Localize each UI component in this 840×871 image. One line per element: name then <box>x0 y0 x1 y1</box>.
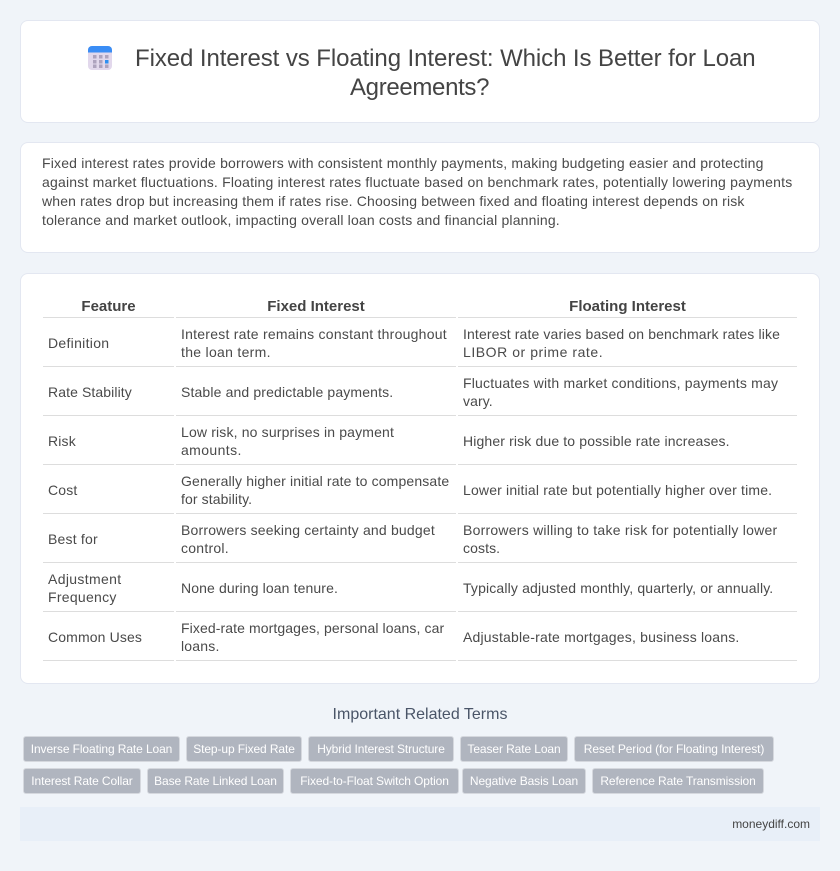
comparison table panel <box>20 273 820 684</box>
row: Best for: Best for <box>48 531 98 547</box>
related terms tags: Base Rate Linked Loan <box>154 774 277 788</box>
related terms tags: Teaser Rate Loan <box>467 742 561 756</box>
related terms tags: Inverse Floating Rate Loan <box>31 742 172 756</box>
comparison table: Higher risk due to possible rate increases. <box>463 433 730 449</box>
comparison table: Borrowers willing to take risk for potentially lower <box>463 522 777 538</box>
comparison table: Fixed-rate mortgages, personal loans, car <box>181 620 444 636</box>
footer bar <box>20 807 820 841</box>
summary text: tolerance and market outlook, impacting overall loan costs and financial planning. <box>42 212 560 228</box>
title: Agreements? <box>350 74 489 101</box>
summary text: against market fluctuations. Floating interest rates fluctuate based on benchmark rates, potentially lowering payments <box>42 174 792 190</box>
row: Adjustment Frequency: Frequency <box>48 589 117 605</box>
column header: Feature: Feature <box>81 298 136 315</box>
comparison table: amounts. <box>181 442 242 458</box>
row: Adjustment Frequency: Adjustment <box>48 571 122 587</box>
title <box>135 45 756 101</box>
comparison table: costs. <box>463 540 500 556</box>
comparison table: Generally higher initial rate to compensate <box>181 473 449 489</box>
comparison table: control. <box>181 540 229 556</box>
comparison table: Fluctuates with market conditions, payments may <box>463 375 778 391</box>
title: Fixed Interest vs Floating Interest: Which Is Better for Loan <box>135 45 756 72</box>
icon: calendar <box>88 46 112 70</box>
related terms heading: Important Related Terms <box>333 706 507 723</box>
column header: Fixed Interest: Fixed Interest <box>267 298 365 315</box>
comparison table: Interest rate remains constant throughout <box>181 326 447 342</box>
related terms tags: Step-up Fixed Rate <box>193 742 295 756</box>
row: Cost: Cost <box>48 482 77 498</box>
comparison table: loans. <box>181 638 220 654</box>
comparison table: for stability. <box>181 491 252 507</box>
related terms tags <box>23 736 774 794</box>
related terms tags: Fixed-to-Float Switch Option <box>300 774 449 788</box>
comparison table: Low risk, no surprises in payment <box>181 424 394 440</box>
summary text <box>42 155 792 228</box>
summary text: when rates drop but increasing them if rates rise. Choosing between fixed and floating interest depends on risk <box>42 193 745 209</box>
related terms tags: Hybrid Interest Structure <box>317 742 445 756</box>
comparison table: the loan term. <box>181 344 271 360</box>
summary panel <box>20 142 820 253</box>
comparison table: Typically adjusted monthly, quarterly, or annually. <box>463 580 773 596</box>
comparison table <box>43 298 797 661</box>
comparison table: Interest rate varies based on benchmark rates like <box>463 326 780 342</box>
column header: Floating Interest: Floating Interest <box>569 298 686 315</box>
comparison table: Lower initial rate but potentially higher over time. <box>463 482 772 498</box>
related terms tags: Reset Period (for Floating Interest) <box>584 742 764 756</box>
related terms tags: Reference Rate Transmission <box>600 774 756 788</box>
row: Definition: Definition <box>48 335 109 351</box>
related terms tags: Negative Basis Loan <box>470 774 578 788</box>
comparison table: Borrowers seeking certainty and budget <box>181 522 435 538</box>
comparison table: LIBOR or prime rate. <box>463 344 603 360</box>
footer source: moneydiff.com <box>732 817 810 831</box>
related terms tags: Interest Rate Collar <box>31 774 133 788</box>
comparison table: None during loan tenure. <box>181 580 338 596</box>
header panel <box>20 20 820 123</box>
row: Common Uses: Common Uses <box>48 629 142 645</box>
comparison table: Adjustable-rate mortgages, business loans. <box>463 629 739 645</box>
comparison table: vary. <box>463 393 493 409</box>
summary text: Fixed interest rates provide borrowers with consistent monthly payments, making budgeting easier and protecting <box>42 155 764 171</box>
row: Rate Stability: Rate Stability <box>48 384 132 400</box>
comparison table: Stable and predictable payments. <box>181 384 393 400</box>
row: Adjustment Frequency <box>48 571 122 605</box>
row: Risk: Risk <box>48 433 76 449</box>
